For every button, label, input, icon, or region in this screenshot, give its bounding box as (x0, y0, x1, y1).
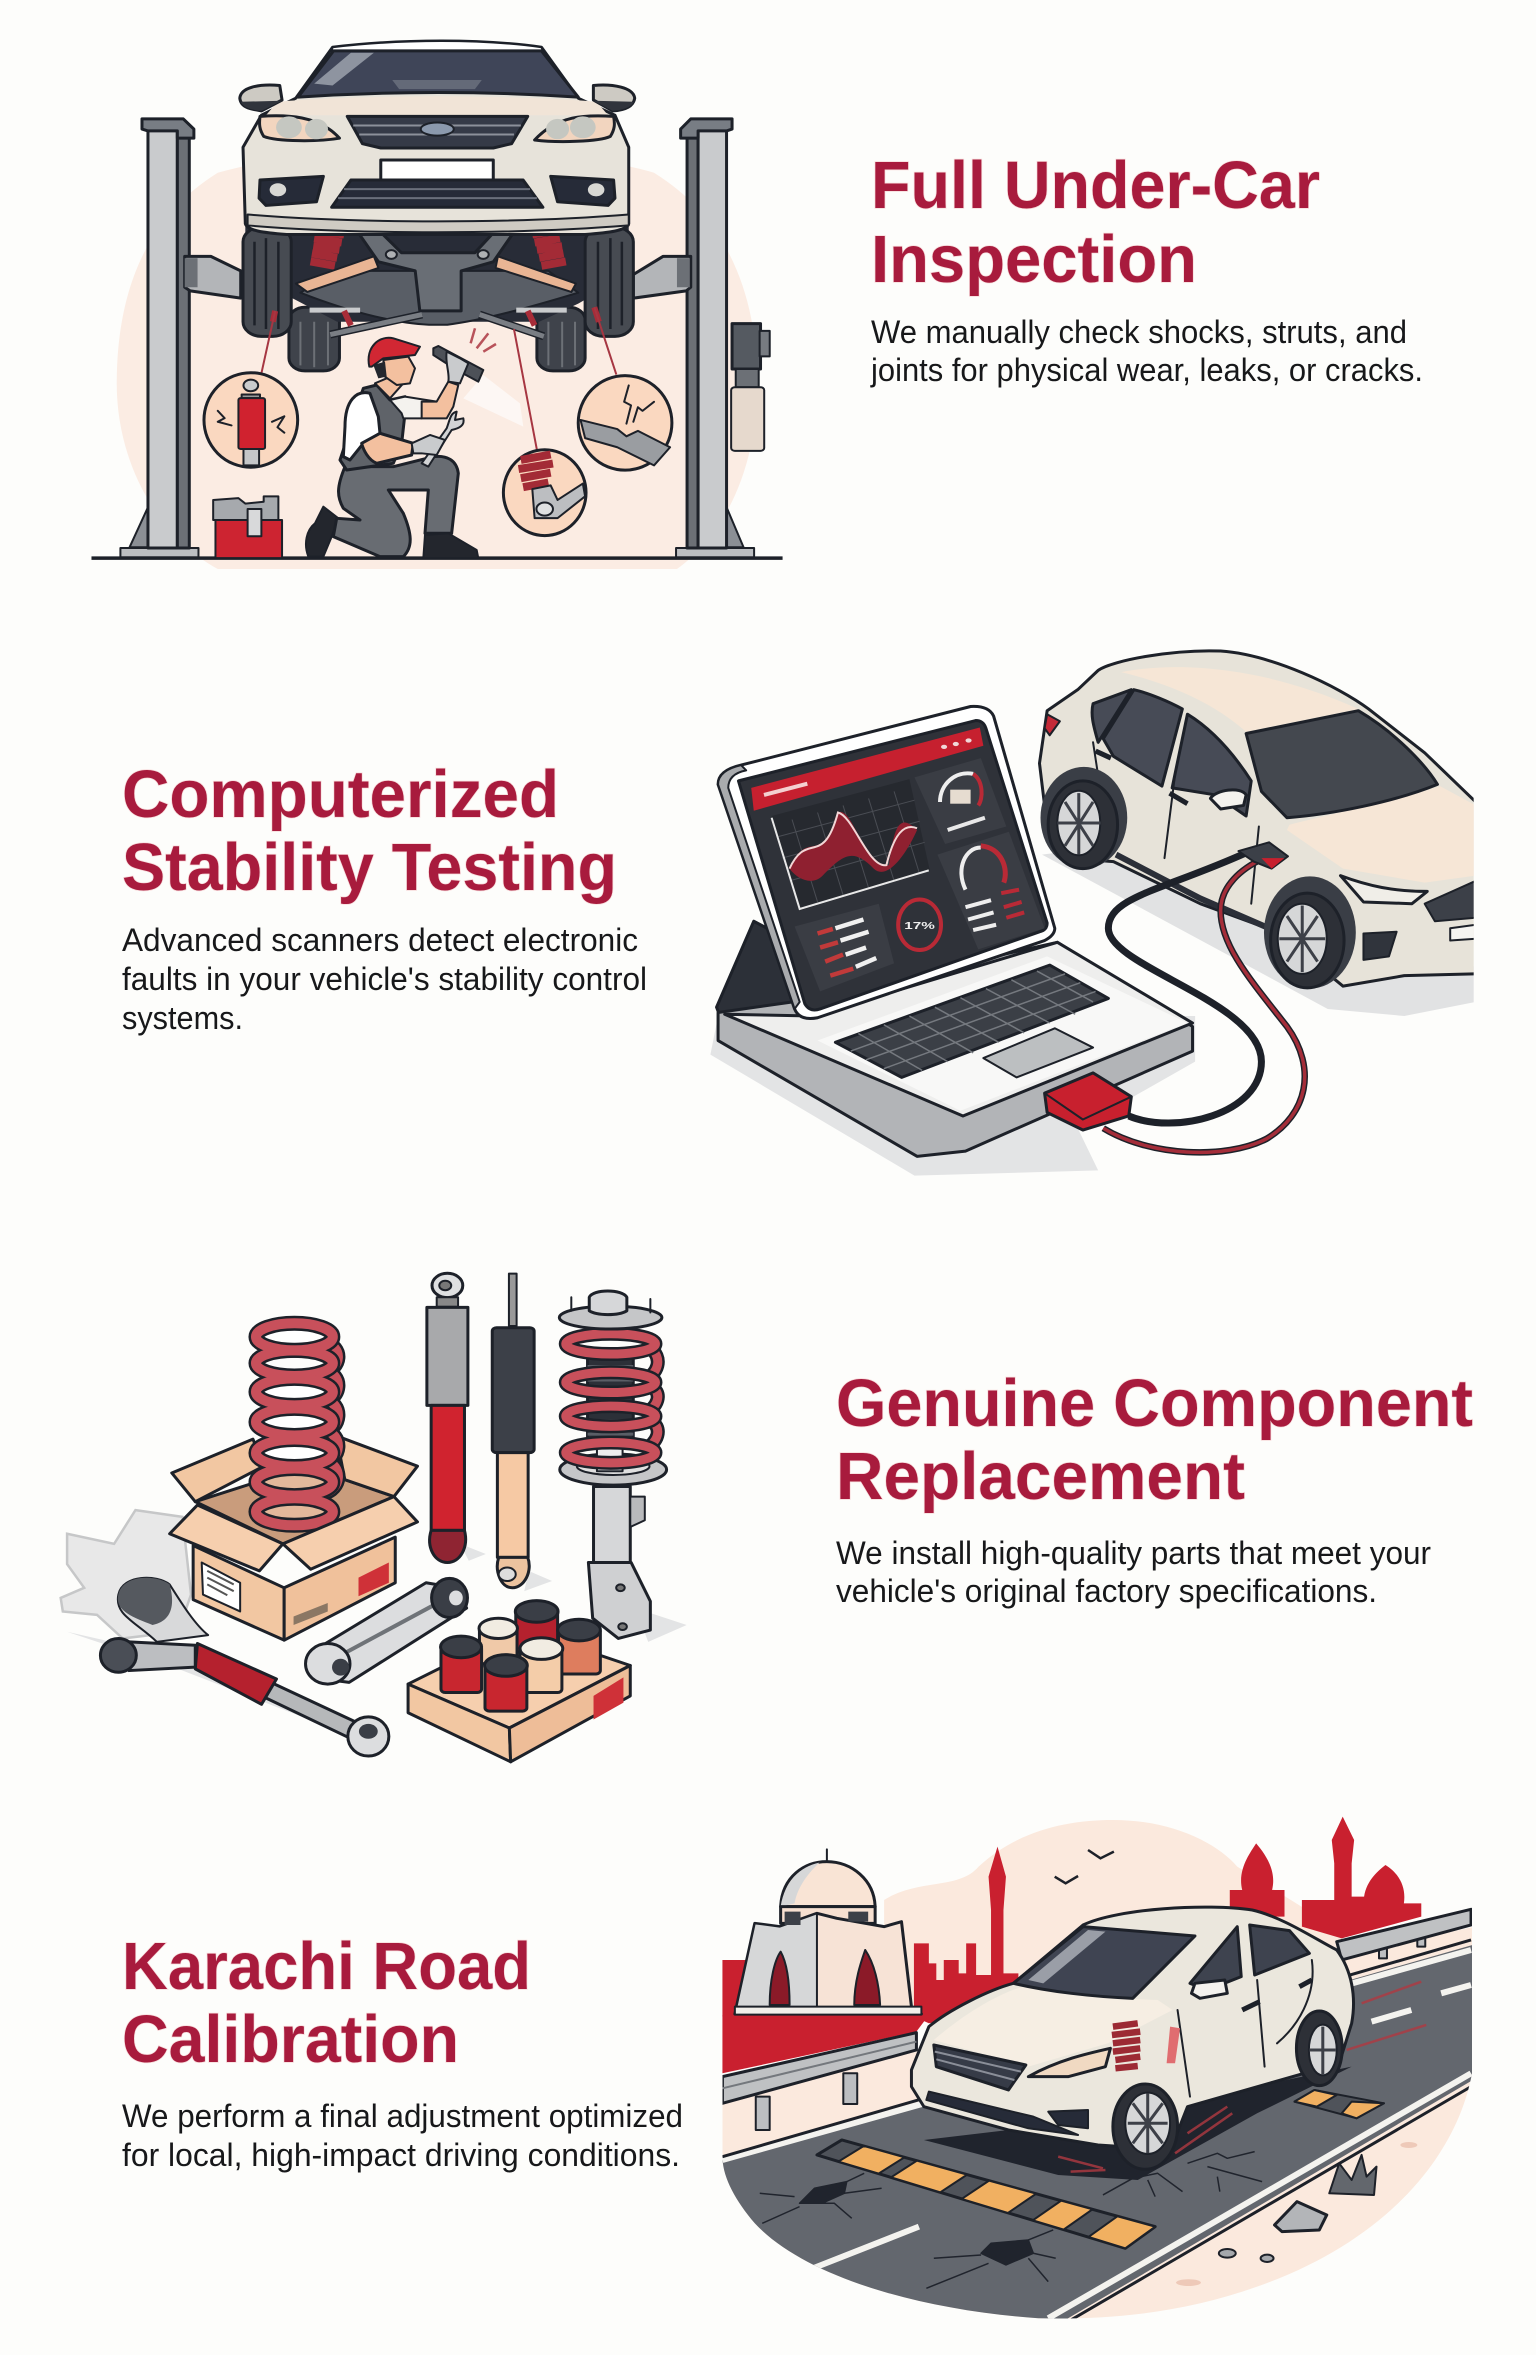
heading: computerized stability testing: Stability Testing (122, 830, 617, 905)
number plate (381, 160, 493, 185)
lower arm (362, 433, 413, 463)
exposed coil spring (1112, 2023, 1140, 2068)
left guard rail (722, 2033, 916, 2130)
sedan lower intake and fog light (926, 2092, 1078, 2135)
laptop shadow (710, 1016, 1195, 1176)
peach backdrop (117, 148, 757, 569)
red cable (1103, 858, 1305, 1152)
screen: bars and percent dial: 17% (904, 919, 935, 931)
black and tan shock absorber (492, 1274, 534, 1588)
OBD plug on car (1238, 842, 1288, 869)
black cable (1108, 853, 1261, 1123)
red link rod (100, 1638, 389, 1756)
text: stability testing description: Advanced scanners detect electronic (122, 922, 638, 958)
shipping box (170, 1323, 417, 1640)
sedan windshield (1013, 1927, 1195, 1998)
box barcode (294, 1603, 328, 1625)
SUV sill (1116, 855, 1269, 928)
exposed damper (1167, 2027, 1180, 2063)
heading: genuine component replacement: Replacement (836, 1439, 1245, 1514)
birds (1055, 1850, 1114, 1883)
SUV grille (1425, 881, 1476, 921)
ground line (91, 556, 783, 560)
car body front view (243, 41, 629, 235)
peach ground (710, 1923, 1490, 2333)
text: inspection description: joints for physical wear, leaks, or cracks. (870, 352, 1423, 388)
road edge lines (722, 1950, 1471, 2318)
fog lights and lower intake (259, 176, 615, 207)
panel: karachi road calibration illustration (710, 1817, 1490, 2333)
road surface (710, 1940, 1490, 2330)
front boot (423, 533, 478, 558)
red shock absorber (427, 1273, 468, 1562)
red cap (369, 338, 420, 367)
callout leader lines (261, 307, 616, 450)
Mazar-e-Quaid monument (735, 1849, 921, 2015)
panel: genuine component replacement illustration (61, 1273, 687, 1762)
SUV body (1039, 651, 1476, 986)
text: component replacement description (836, 1535, 1431, 1609)
rear tyres (289, 307, 585, 371)
side mirrors (240, 85, 635, 111)
text: stability testing description: systems. (122, 1000, 243, 1036)
sedan (911, 1907, 1426, 2172)
front tyres (243, 227, 633, 336)
overall vest (340, 385, 405, 470)
red city skyline (722, 1817, 1421, 2073)
inset: cracked metal (578, 376, 672, 470)
lane dashes (805, 1985, 1471, 2272)
heading: genuine component replacement: Genuine Component (836, 1366, 1473, 1441)
SUV roof and hood (1121, 667, 1358, 732)
SUV door seam (1093, 742, 1259, 904)
bushings on carton (408, 1601, 630, 1762)
spring inside box (256, 1323, 338, 1525)
heading: full under-car inspection: Full Under-Car (871, 148, 1320, 223)
subframe and pan (273, 225, 599, 336)
heading: computerized stability testing: Computerized (122, 757, 559, 832)
laptop base (718, 942, 1193, 1156)
laptop screen (718, 706, 1055, 1019)
impact motion lines (1058, 1982, 1426, 2172)
text: component replacement description: vehicle's original factory specifications. (836, 1573, 1377, 1609)
text: inspection description: We manually check shocks, struts, and (871, 314, 1407, 350)
peach sky (884, 1820, 1357, 2023)
screen: bars and percent dial (795, 899, 941, 991)
red tool box (213, 496, 282, 558)
wrench (422, 412, 464, 467)
heading: karachi road calibration: Karachi Road (122, 1929, 531, 2004)
text: road calibration description (122, 2098, 683, 2173)
heading: full under-car inspection (871, 148, 1320, 297)
flashlight beam (463, 375, 523, 427)
screen: waveform chart (772, 779, 930, 911)
car shadow on road (924, 2067, 1352, 2180)
speed breaker far (1294, 2090, 1384, 2118)
text: stability testing description (122, 922, 647, 1036)
ground shadows (67, 1544, 687, 1750)
back boot (306, 507, 338, 557)
coil springs and control arms (296, 230, 576, 292)
sedan grille (934, 2045, 1026, 2090)
SUV shadow (1042, 844, 1476, 1016)
SUV (1039, 651, 1476, 1016)
work trousers (333, 456, 458, 557)
text: road calibration description: for local, high-impact driving conditions. (122, 2137, 680, 2173)
steering knuckle (61, 1510, 208, 1642)
heading: genuine component replacement (836, 1366, 1473, 1514)
SUV windshield (1246, 711, 1437, 818)
speed breaker near (817, 2140, 1155, 2248)
complete strut assembly (559, 1291, 667, 1638)
upper glove (446, 352, 468, 383)
heading: computerized stability testing (122, 757, 617, 905)
SUV rear wheel (1041, 767, 1127, 869)
sedan mirror and door lines (1191, 1980, 1227, 1998)
left lift post (120, 119, 241, 557)
text: road calibration description: We perform a final adjustment optimized (122, 2098, 683, 2134)
underbody (245, 224, 629, 322)
heading: karachi road calibration: Calibration (122, 2002, 459, 2077)
right lift post (633, 119, 754, 557)
OBD connector (1045, 1073, 1131, 1130)
right guard rail (1337, 1909, 1471, 1960)
clipped ground scene (710, 1909, 1490, 2333)
panel: computerized stability testing illustration (710, 651, 1476, 1176)
inspection sparks (471, 328, 496, 352)
neck and face (373, 357, 415, 398)
silver control arm (306, 1578, 467, 1684)
flashlight (433, 346, 483, 382)
lower glove (412, 435, 445, 455)
inset: worn coil joint (503, 450, 586, 536)
text: component replacement description: We install high-quality parts that meet your (836, 1535, 1431, 1571)
sedan hood (934, 1987, 1173, 2067)
rear wheel (1296, 2011, 1342, 2086)
laptop stand (717, 921, 792, 1018)
sedan headlight (1028, 2048, 1110, 2077)
SUV headlight (1341, 876, 1427, 904)
roadside grass and rocks (1176, 2142, 1417, 2286)
panel: full under-car inspection illustration (91, 41, 783, 569)
radiator grille and badge (347, 116, 528, 148)
heading: full under-car inspection: Inspection (871, 222, 1197, 297)
laptop keyboard (835, 965, 1108, 1077)
text: stability testing description: faults in your vehicle's stability control (122, 961, 647, 997)
front wheel (1113, 2084, 1178, 2169)
sedan side windows (1190, 1925, 1309, 1990)
laptop touchpad (983, 1028, 1093, 1077)
raised arm (422, 382, 458, 418)
SUV windows (1092, 690, 1251, 816)
sedan body (911, 1907, 1354, 2147)
text: inspection description (870, 314, 1423, 388)
SUV front wheel (1264, 876, 1356, 989)
screen: status gauges (914, 758, 1045, 949)
box red tag (359, 1562, 389, 1596)
headlights (260, 116, 614, 142)
box label (202, 1562, 240, 1611)
SUV mirror and door handles (1210, 790, 1246, 809)
inset: leaking shock (204, 373, 298, 467)
heading: karachi road calibration (122, 1929, 531, 2077)
hydraulic power unit (731, 324, 770, 451)
white shirt (343, 393, 437, 460)
road cracks (760, 2152, 1262, 2288)
mechanic with flashlight and wrench (306, 328, 523, 558)
